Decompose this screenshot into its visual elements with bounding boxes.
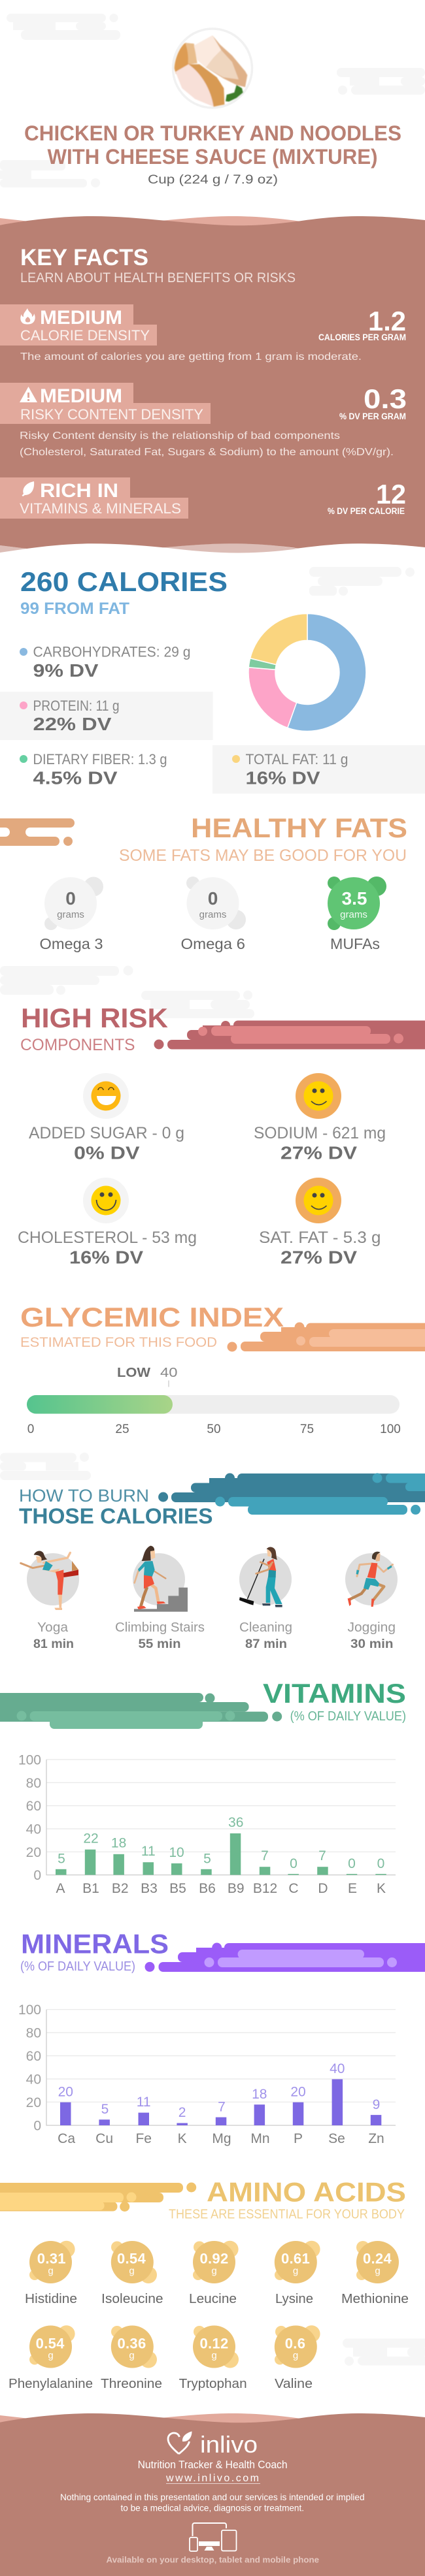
activity: jogging: Jogging — [348, 1620, 396, 1635]
banner streak: healthy fats — [0, 818, 75, 846]
bar chart: minerals: 100 — [18, 2003, 41, 2018]
banner streak: amino acids — [0, 2183, 196, 2212]
bar chart: minerals: K — [178, 2131, 187, 2146]
disclaimer — [60, 2492, 365, 2513]
heading: calories: 260 CALORIES — [20, 566, 228, 597]
stat: omega 3: Omega 3 — [39, 935, 103, 952]
stat: omega 6: grams — [199, 909, 226, 920]
stat: phenylalanine: 0.54 — [36, 2336, 65, 2352]
activity: climbing stairs: 55 min — [139, 1637, 180, 1651]
bar chart: minerals: Mn — [250, 2131, 270, 2146]
key fact: rich in vitamins and minerals: 12 — [376, 479, 406, 509]
section: minerals — [18, 1929, 425, 2146]
bar chart: vitamins: 22 — [83, 1831, 99, 1846]
key fact: calorie density: CALORIES PER GRAM — [318, 332, 406, 342]
legend: carbohydrates: CARBOHYDRATES: 29 g — [33, 644, 191, 660]
stat: threonine: 0.36 — [117, 2336, 146, 2352]
stat: leucine — [189, 2241, 239, 2306]
subheading: amino acids: THESE ARE ESSENTIAL FOR YOUR BODY — [169, 2208, 405, 2222]
banner streak: burn calories — [158, 1473, 425, 1515]
stat: tryptophan: g — [211, 2350, 217, 2361]
bar chart: vitamins: 60 — [26, 1799, 41, 1814]
bar chart: vitamins: K — [377, 1881, 386, 1896]
stat: threonine: Threonine — [101, 2377, 162, 2391]
heading: glycemic index: GLYCEMIC INDEX — [20, 1302, 284, 1332]
bar chart: vitamins: 0 — [33, 1868, 41, 1883]
bar chart: vitamins: 80 — [26, 1776, 41, 1791]
bar chart: minerals: 80 — [26, 2026, 41, 2040]
bar chart: vitamins: 11 — [141, 1844, 156, 1859]
subheading: percent of daily value: (% OF DAILY VALUE) — [290, 1709, 406, 1724]
stat: isoleucine: Isoleucine — [101, 2292, 163, 2306]
risk item: saturated fat: 27% DV — [280, 1248, 357, 1267]
heading: high risk: HIGH RISK — [21, 1003, 168, 1033]
stat: leucine: 0.92 — [199, 2251, 229, 2266]
bar chart: vitamins: E — [348, 1881, 357, 1896]
bar chart: vitamins — [18, 1753, 396, 1896]
gauge: glycemic index 40 low: 0 — [27, 1423, 34, 1436]
title — [24, 121, 401, 169]
subheading: healthy fats: SOME FATS MAY BE GOOD FOR YOU — [119, 846, 407, 865]
bar chart: vitamins: C — [288, 1881, 299, 1896]
bar chart: minerals: Se — [328, 2131, 345, 2146]
disclaimer: Nothing contained in this presentation and our services is intended or implied — [60, 2492, 365, 2502]
stat: isoleucine — [101, 2241, 163, 2306]
key fact: risky content density: % DV PER GRAM — [339, 411, 406, 421]
bar chart: minerals: 9 — [373, 2097, 380, 2112]
legend: carbohydrates: 9% DV — [33, 660, 99, 681]
stat: histidine — [25, 2241, 77, 2306]
bar chart: minerals: Zn — [368, 2131, 384, 2146]
bar chart: minerals: 40 — [26, 2072, 41, 2087]
risk item: cholesterol: CHOLESTEROL - 53 mg — [18, 1229, 197, 1247]
legend: total fat — [212, 745, 425, 794]
bar chart: minerals: Mg — [212, 2131, 231, 2146]
bar chart: vitamins: 0 — [348, 1856, 356, 1871]
bar chart: minerals: 7 — [218, 2099, 226, 2115]
stat: lysine: g — [293, 2265, 298, 2277]
stat: phenylalanine: Phenylalanine — [8, 2377, 93, 2391]
stat: valine: g — [293, 2350, 298, 2361]
bar chart: vitamins: B1 — [82, 1881, 99, 1896]
legend: protein: PROTEIN: 11 g — [33, 698, 119, 714]
risk item: added sugar — [29, 1073, 184, 1163]
logo: inlivo: inlivo — [200, 2431, 258, 2458]
key fact: rich in vitamins and minerals: VITAMINS & MINERALS — [20, 500, 181, 517]
food photo: chicken — [173, 29, 252, 108]
bar chart: vitamins: 0 — [377, 1856, 384, 1871]
section: glycemic index — [20, 1302, 425, 1436]
bar chart: vitamins: A — [56, 1881, 65, 1896]
title: WITH CHEESE SAUCE (MIXTURE) — [47, 145, 378, 169]
risk item: sodium: SODIUM - 621 mg — [254, 1124, 386, 1142]
bar chart: vitamins: 5 — [58, 1852, 65, 1867]
key fact: rich in vitamins and minerals: % DV PER CALORIE — [328, 506, 405, 516]
gauge: glycemic index 40 low: 75 — [300, 1423, 314, 1436]
activity: climbing stairs: Climbing Stairs — [115, 1620, 205, 1635]
bar chart: minerals: 20 — [26, 2095, 41, 2110]
stat: isoleucine: g — [129, 2265, 135, 2277]
section: high risk components — [18, 1003, 425, 1267]
bar chart: vitamins: D — [318, 1881, 328, 1896]
disclaimer: to be a medical advice, diagnosis or treatment. — [120, 2503, 304, 2513]
bar chart: vitamins: B9 — [228, 1881, 245, 1896]
bar chart: minerals: 2 — [178, 2105, 186, 2120]
stat: valine: 0.6 — [285, 2336, 305, 2352]
bar chart: minerals: 18 — [252, 2087, 267, 2102]
heading: those calories: THOSE CALORIES — [19, 1504, 213, 1528]
stat: mufas: grams — [340, 909, 367, 920]
section: calories — [0, 566, 425, 794]
activity: yoga: 81 min — [33, 1637, 74, 1651]
activity: jogging — [345, 1552, 398, 1651]
section: healthy fats — [0, 813, 407, 952]
icon: warning — [20, 387, 37, 402]
stat: threonine — [101, 2325, 162, 2391]
key fact: rich in vitamins and minerals — [0, 477, 406, 519]
key fact: risky content density: (Cholesterol, Saturated Fat, Sugars & Sodium) to the amount (%DV/gr). — [20, 447, 394, 458]
stat: phenylalanine: g — [48, 2350, 54, 2361]
bar chart: minerals: Ca — [58, 2131, 75, 2146]
key fact: rich in vitamins and minerals: RICH IN — [40, 480, 118, 502]
serving size: Cup (224 g / 7.9 oz) — [148, 173, 278, 187]
bar chart: minerals: 20 — [290, 2085, 306, 2099]
bar chart: vitamins: 7 — [261, 1848, 269, 1863]
gauge: glycemic index 40 low: 40 — [160, 1366, 178, 1380]
stat: leucine: Leucine — [189, 2292, 237, 2306]
bar chart: vitamins: 10 — [169, 1845, 184, 1860]
stat: methionine: Methionine — [341, 2292, 409, 2306]
bar chart: minerals: 11 — [137, 2095, 151, 2110]
subheading: percent of daily value: (% OF DAILY VALUE) — [20, 1959, 135, 1974]
bar chart: minerals: 0 — [33, 2119, 41, 2133]
stat: omega 6 — [180, 877, 246, 952]
section: vitamins — [0, 1678, 406, 1896]
key fact: calorie density: The amount of calories you are getting from 1 gram is moderate. — [20, 351, 362, 362]
key fact: calorie density: 1.2 — [368, 306, 406, 336]
key fact: risky content density: 0.3 — [364, 383, 407, 414]
bar chart: minerals: P — [294, 2131, 303, 2146]
key fact: calorie density — [0, 304, 406, 362]
section: amino acids — [0, 2177, 409, 2391]
risk item: sodium: 27% DV — [280, 1143, 357, 1163]
website: www.inlivo.com — [165, 2473, 259, 2484]
legend: dietary fiber: DIETARY FIBER: 1.3 g — [33, 751, 167, 767]
bar chart: vitamins: B12 — [253, 1881, 277, 1896]
activity: cleaning — [239, 1547, 292, 1651]
bar chart: minerals: Fe — [135, 2131, 152, 2146]
stat: lysine — [275, 2241, 320, 2306]
gauge: glycemic index 40 low: 100 — [380, 1423, 401, 1436]
stat: omega 3 — [39, 877, 103, 952]
stat: threonine: g — [129, 2350, 135, 2361]
key fact: calorie density: CALORIE DENSITY — [20, 327, 150, 344]
bar chart: minerals: 5 — [101, 2102, 109, 2117]
bar chart: vitamins: 7 — [318, 1848, 326, 1863]
bar chart: vitamins: 100 — [18, 1753, 41, 1767]
legend: protein: 22% DV — [33, 714, 112, 734]
stat: lysine: 0.61 — [281, 2251, 310, 2266]
stat: phenylalanine — [8, 2325, 93, 2391]
activity: jogging: 30 min — [350, 1637, 394, 1651]
stat: methionine: g — [375, 2265, 381, 2277]
risk item: sodium — [254, 1073, 386, 1163]
bar chart: vitamins: 40 — [26, 1822, 41, 1837]
activity: yoga: Yoga — [37, 1620, 69, 1635]
bar chart: vitamins: B5 — [169, 1881, 186, 1896]
legend: total fat: TOTAL FAT: 11 g — [246, 751, 348, 767]
stat: mufas — [328, 877, 386, 952]
activity: climbing stairs — [115, 1546, 205, 1651]
banner streak: glycemic index — [228, 1322, 425, 1352]
bar chart: minerals: 20 — [58, 2085, 73, 2099]
activity: cleaning: Cleaning — [239, 1620, 292, 1635]
stat: omega 3: grams — [57, 909, 84, 920]
risk item: saturated fat: SAT. FAT - 5.3 g — [259, 1229, 381, 1247]
risk item: added sugar: 0% DV — [74, 1143, 140, 1163]
key fact: risky content density: MEDIUM — [40, 385, 122, 407]
footer panel — [0, 2413, 425, 2576]
stat: omega 3: 0 — [65, 888, 76, 909]
legend: dietary fiber: 4.5% DV — [33, 768, 118, 788]
bar chart: vitamins: 18 — [111, 1835, 126, 1851]
subheading: glycemic index: ESTIMATED FOR THIS FOOD — [20, 1335, 217, 1350]
bar chart: vitamins: 0 — [290, 1856, 298, 1871]
heading: how to burn: HOW TO BURN — [19, 1486, 149, 1505]
stat: histidine: g — [48, 2265, 54, 2277]
gauge: glycemic index 40 low: 25 — [115, 1423, 129, 1436]
risk item: cholesterol: 16% DV — [69, 1248, 143, 1267]
bar chart: minerals: Cu — [95, 2131, 113, 2146]
gauge: glycemic index 40 low: LOW — [117, 1366, 150, 1380]
bar chart: vitamins: 5 — [203, 1852, 211, 1867]
donut chart: macronutrients — [248, 614, 366, 732]
key fact: risky content density: Risky Content density is the relationship of bad components — [20, 430, 340, 442]
stat: valine — [275, 2325, 320, 2391]
bar chart: minerals — [18, 2003, 396, 2146]
subheading: key facts: LEARN ABOUT HEALTH BENEFITS OR RISKS — [20, 270, 296, 285]
logo: inlivo — [168, 2431, 258, 2458]
banner streak: minerals — [145, 1942, 425, 1972]
stat: mufas: 3.5 — [342, 888, 367, 909]
subheading: calories from fat: 99 FROM FAT — [20, 600, 129, 618]
stat: tryptophan: Tryptophan — [179, 2377, 247, 2391]
legend: carbohydrates — [20, 644, 191, 681]
banner streak: vitamins — [0, 1693, 282, 1729]
banner streak: high risk — [154, 1020, 425, 1049]
stat: omega 6: 0 — [208, 888, 218, 909]
heading: healthy fats: HEALTHY FATS — [191, 813, 407, 843]
legend: protein — [0, 692, 213, 740]
risk item: cholesterol — [18, 1178, 197, 1267]
stat: tryptophan — [179, 2325, 247, 2391]
stat: tryptophan: 0.12 — [199, 2336, 229, 2352]
bar chart: vitamins: 36 — [228, 1815, 243, 1830]
risk item: added sugar: ADDED SUGAR - 0 g — [29, 1124, 184, 1142]
stat: lysine: Lysine — [275, 2292, 313, 2306]
legend: dietary fiber — [20, 751, 167, 788]
stat: mufas: MUFAs — [330, 935, 380, 952]
bar chart: minerals: 40 — [330, 2061, 345, 2076]
section: how to burn those calories — [19, 1473, 425, 1651]
heading: key facts: KEY FACTS — [20, 245, 148, 270]
stat: leucine: g — [211, 2265, 217, 2277]
stat: omega 6: Omega 6 — [180, 935, 245, 952]
icon: leaf — [22, 481, 34, 496]
activity: cleaning: 87 min — [245, 1637, 287, 1651]
stat: histidine: Histidine — [25, 2292, 77, 2306]
stat: valine: Valine — [275, 2377, 313, 2391]
tagline: Nutrition Tracker & Health Coach — [138, 2458, 288, 2471]
icon: flame — [20, 308, 35, 324]
key fact: risky content density — [0, 383, 407, 458]
gauge: glycemic index 40 low: 50 — [207, 1423, 221, 1436]
heading: minerals: MINERALS — [21, 1929, 169, 1959]
bar chart: vitamins: B6 — [199, 1881, 216, 1896]
heading: amino acids: AMINO ACIDS — [207, 2177, 406, 2208]
stat: methionine — [341, 2241, 409, 2306]
bar chart: minerals: 60 — [26, 2049, 41, 2064]
activity: yoga — [21, 1551, 79, 1651]
stat: isoleucine: 0.54 — [117, 2251, 146, 2266]
stat: methionine: 0.24 — [363, 2251, 392, 2266]
subheading: components: COMPONENTS — [20, 1036, 135, 1054]
risk item: saturated fat — [259, 1178, 381, 1267]
panel: key facts — [0, 216, 425, 553]
heading: vitamins: VITAMINS — [263, 1678, 406, 1709]
availability note: Available on your desktop, tablet and mobile phone — [106, 2554, 319, 2564]
icon: devices — [190, 2523, 237, 2551]
bar chart: vitamins: B3 — [141, 1881, 158, 1896]
bar chart: vitamins: 20 — [26, 1845, 41, 1860]
stat: histidine: 0.31 — [37, 2251, 66, 2266]
key fact: risky content density: RISKY CONTENT DENSITY — [20, 406, 203, 423]
key fact: calorie density: MEDIUM — [40, 307, 122, 329]
legend: total fat: 16% DV — [246, 768, 320, 788]
gauge: glycemic index 40 low — [27, 1366, 401, 1436]
title: CHICKEN OR TURKEY AND NOODLES — [24, 121, 401, 145]
bar chart: vitamins: B2 — [112, 1881, 129, 1896]
